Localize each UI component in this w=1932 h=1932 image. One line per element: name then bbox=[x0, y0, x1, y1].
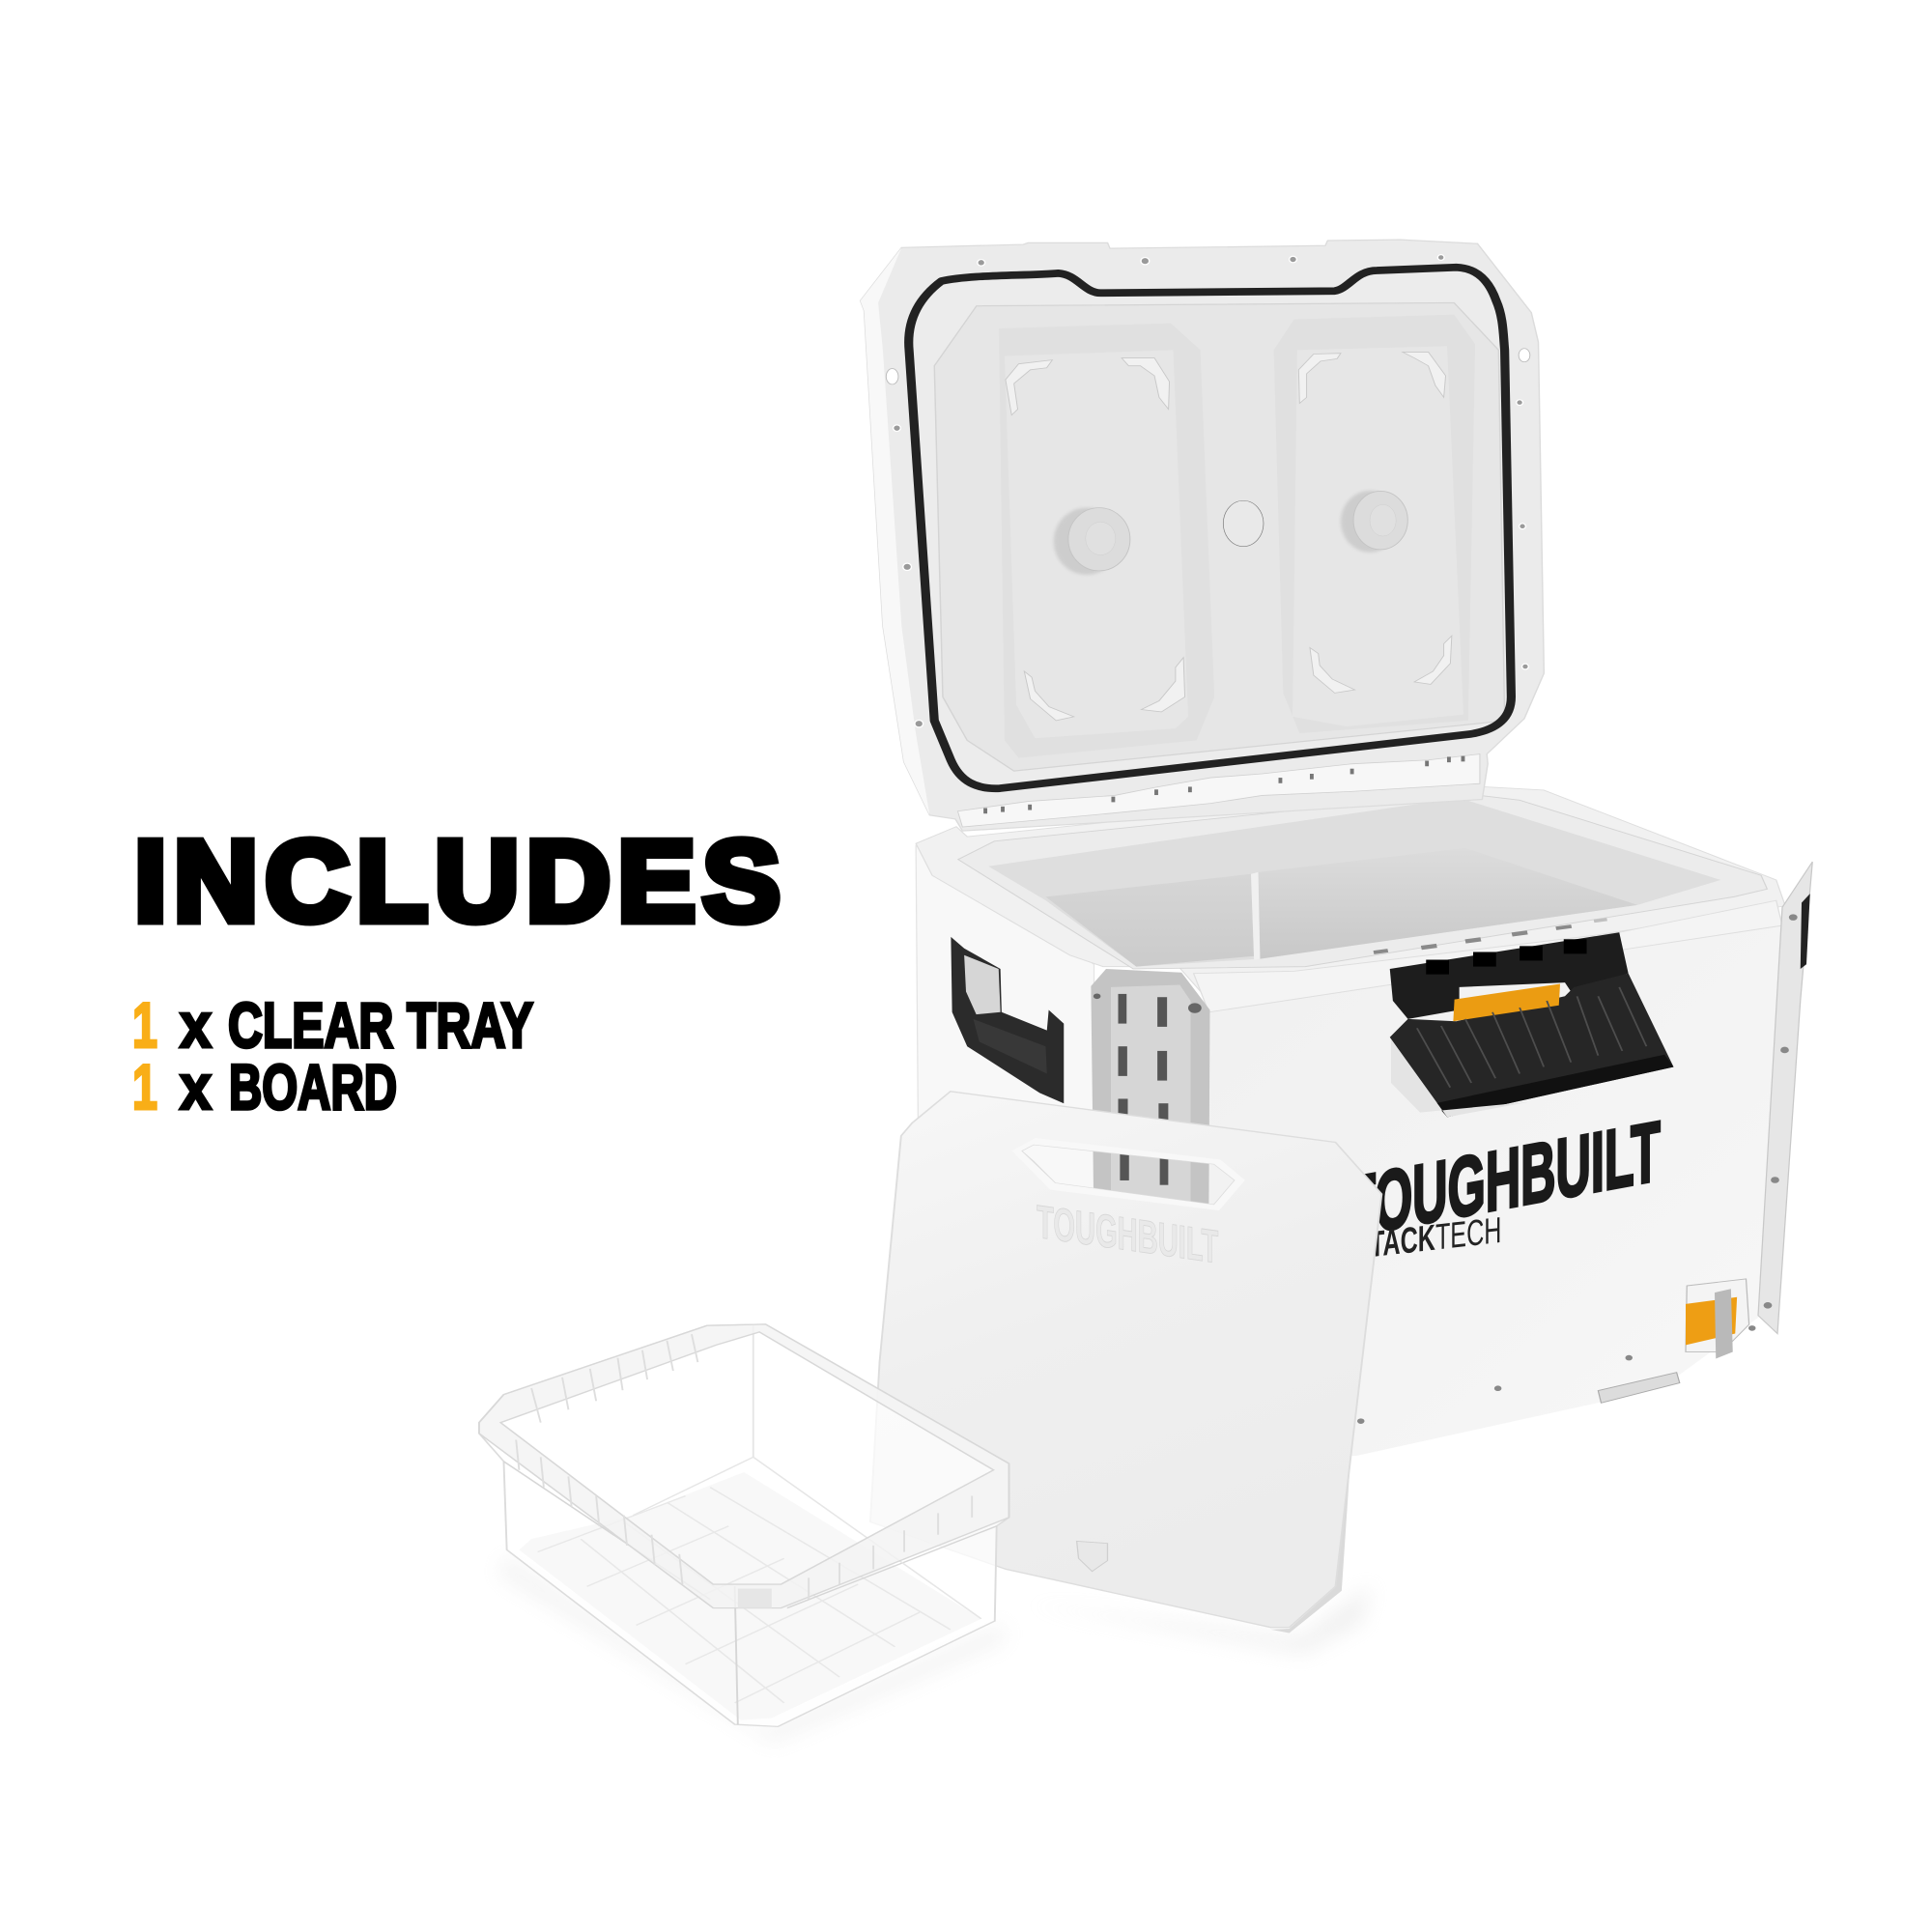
orange rear latch bbox=[1686, 1279, 1749, 1359]
board: TOUGHBUILT bbox=[1037, 1195, 1218, 1273]
left side panel bbox=[916, 846, 1094, 1229]
list item: board: 1 bbox=[132, 1051, 157, 1122]
list item: clear tray: 1 bbox=[132, 989, 157, 1061]
board embossed icon bbox=[1077, 1541, 1108, 1572]
base step bbox=[1598, 1373, 1680, 1403]
lid raised panel bbox=[934, 302, 1505, 771]
list item: board: x bbox=[180, 1051, 212, 1122]
lid left recess bbox=[999, 324, 1214, 758]
lid corner ribs bbox=[1006, 352, 1452, 721]
tray rim ribs bbox=[516, 1334, 972, 1600]
floor shadow bbox=[497, 1555, 1372, 1744]
lid right pad bbox=[1293, 346, 1463, 726]
lid outer shell bbox=[861, 240, 1544, 831]
latch lip bbox=[1435, 1055, 1673, 1117]
rim vents bbox=[1374, 918, 1607, 954]
board shadow edge bbox=[1271, 1453, 1350, 1633]
rim inner opening bbox=[958, 793, 1767, 969]
tray latch tab bbox=[738, 1589, 772, 1608]
list item: clear tray bbox=[132, 989, 533, 1061]
lid interior surround bbox=[906, 269, 1510, 788]
cavity right compartment bbox=[1258, 848, 1637, 959]
list item: clear tray: CLEAR TRAY bbox=[228, 989, 533, 1061]
latch cast shadow bbox=[1391, 1039, 1528, 1117]
tray front corner and edges bbox=[503, 1462, 997, 1724]
front rim lip bbox=[1194, 900, 1782, 1012]
lid hinges bbox=[957, 754, 1480, 827]
lid knob left bbox=[1054, 508, 1130, 575]
rim bbox=[916, 785, 1785, 1001]
tray inner back edges bbox=[633, 1325, 981, 1619]
board bbox=[870, 1092, 1381, 1633]
lid hinge holes bbox=[886, 349, 1530, 384]
list item: board bbox=[132, 1051, 397, 1122]
latch orange bar bbox=[1453, 984, 1560, 1021]
lid center circle bbox=[1223, 500, 1264, 547]
board slab bbox=[870, 1092, 1381, 1628]
tray rim bbox=[479, 1324, 1009, 1608]
board handle rim bbox=[1012, 1138, 1245, 1210]
brand: STACKTECH: STACKTECH bbox=[1353, 1210, 1501, 1267]
compartment divider bbox=[1251, 872, 1260, 960]
corner bracket bbox=[1091, 969, 1209, 1229]
lid gasket seal bbox=[909, 268, 1511, 788]
tray floor pattern bbox=[538, 1488, 951, 1703]
front panel bbox=[1190, 925, 1782, 1457]
left handle bbox=[951, 937, 1064, 1103]
right corner strip bbox=[1357, 862, 1812, 1424]
list item: clear tray: x bbox=[180, 989, 212, 1061]
tray floor bbox=[519, 1472, 981, 1720]
heading: INCLUDES: INCLUDES bbox=[134, 817, 787, 946]
panel: includes text bbox=[132, 817, 787, 1122]
clear tray bbox=[479, 1324, 1009, 1726]
cavity back walls bbox=[988, 798, 1720, 967]
lid bbox=[861, 240, 1544, 831]
latch bbox=[1390, 932, 1673, 1117]
lid left pad bbox=[1005, 350, 1188, 738]
list item: board: BOARD bbox=[229, 1051, 397, 1122]
lid right recess bbox=[1274, 315, 1475, 733]
tray body bbox=[479, 1324, 1009, 1726]
lid knob right bbox=[1341, 491, 1407, 553]
cooler body bbox=[916, 785, 1812, 1457]
lid screws bbox=[894, 255, 1528, 727]
cavity left compartment bbox=[1045, 874, 1254, 967]
lid light edge bbox=[861, 247, 929, 815]
